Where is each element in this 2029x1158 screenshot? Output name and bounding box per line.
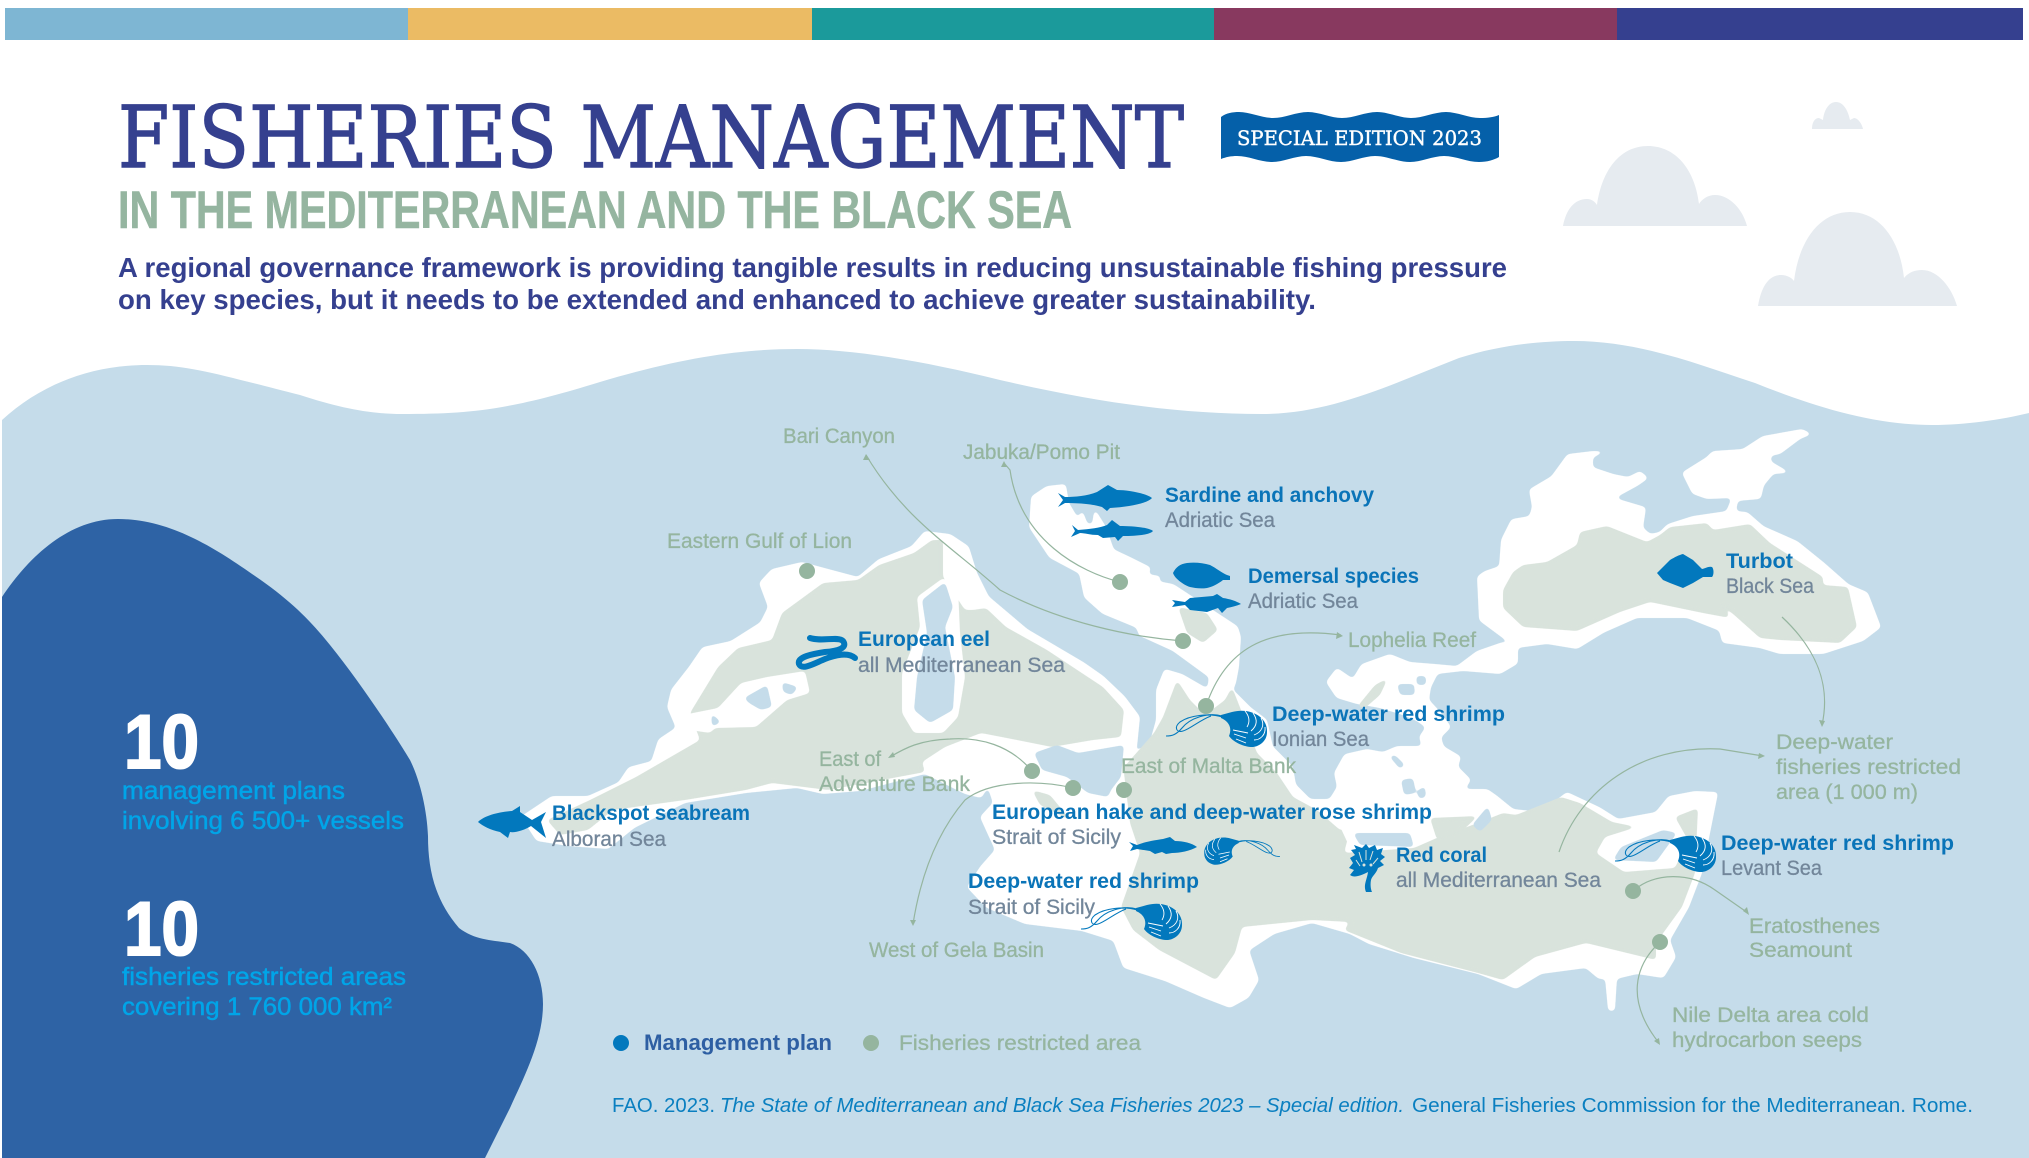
icon: demersal flatfish <box>1173 563 1230 588</box>
figure: restricted areas <box>122 887 406 1021</box>
plan: deep-water red shrimp, Ionian: Deep-water red shrimp <box>1272 703 1505 726</box>
label: Deep-water fisheries restricted area: Deep-water <box>1776 731 1893 754</box>
icon: rose shrimp <box>1204 838 1280 865</box>
plan: turbot <box>1726 550 1814 598</box>
badge: special edition <box>1221 112 1499 162</box>
sea background <box>2 341 2029 1158</box>
plan: european hake and rose shrimp: European hake and deep-water rose shrimp <box>992 801 1432 824</box>
source citation: The State of Mediterranean and Black Sea Fisheries 2023 – Special edition. <box>720 1095 1404 1117</box>
label: Nile Delta: hydrocarbon seeps <box>1672 1029 1862 1052</box>
plan: deep-water red shrimp, Ionian: Ionian Sea <box>1272 728 1369 751</box>
label: Bari Canyon: Bari Canyon <box>783 425 895 448</box>
plan: european hake and rose shrimp <box>992 801 1432 849</box>
icon: turbot <box>1657 554 1714 588</box>
restricted area dots <box>799 563 1668 950</box>
top colour band <box>5 8 2023 40</box>
plan: blackspot seabream: Alboran Sea <box>552 828 666 851</box>
icon: demersal fish <box>1172 594 1241 613</box>
plan: demersal species: Demersal species <box>1248 565 1419 588</box>
title: FISHERIES MANAGEMENT <box>118 89 1184 188</box>
plan: deep-water red shrimp, Sicily: Deep-water red shrimp <box>968 870 1199 893</box>
label: Eratosthenes Seamount: Seamount <box>1749 939 1852 962</box>
subtitle: IN THE MEDITERRANEAN AND THE BLACK SEA <box>118 181 1072 240</box>
label: Eastern Gulf of Lion: Eastern Gulf of Lion <box>667 530 852 553</box>
label: Deep-water fisheries restricted area <box>1776 731 1961 804</box>
plan: sardine and anchovy: Adriatic Sea <box>1165 509 1275 532</box>
figure: management plans: management plans <box>122 777 345 805</box>
badge: special edition: SPECIAL EDITION 2023 <box>1237 126 1482 150</box>
icon: anchovy <box>1071 520 1153 541</box>
icon: red coral <box>1349 844 1385 892</box>
label: Deep-water fisheries restricted area: fisheries restricted <box>1776 756 1961 779</box>
label: Lophelia Reef: Lophelia Reef <box>1348 629 1476 652</box>
figure: restricted areas: covering 1 760 000 km² <box>122 993 392 1021</box>
plan: deep-water red shrimp, Levant <box>1721 832 1954 880</box>
plan: demersal species <box>1248 565 1419 613</box>
leader lines and arrows <box>863 454 1825 1045</box>
figure: management plans: involving 6 500+ vessels <box>122 807 404 835</box>
plan: european eel <box>858 628 1065 677</box>
label: Deep-water fisheries restricted area: area (1 000 m) <box>1776 781 1918 804</box>
label: Jabuka/Pomo Pit: Jabuka/Pomo Pit <box>963 441 1120 464</box>
label: East of Adventure Bank: East of <box>819 748 881 771</box>
legend: Fisheries restricted area <box>899 1032 1141 1055</box>
figure: management plans: 10 <box>124 700 199 785</box>
label: Nile Delta: Nile Delta area cold <box>1672 1004 1869 1027</box>
label: East of Adventure Bank <box>819 748 970 796</box>
icon: red shrimp, Strait of Sicily <box>1081 904 1182 940</box>
intro text <box>118 252 1507 315</box>
plan: blackspot seabream: Blackspot seabream <box>552 802 750 825</box>
panel: key figures <box>2 519 543 1158</box>
plan: blackspot seabream <box>552 802 750 851</box>
plan: turbot: Black Sea <box>1726 575 1814 598</box>
legend <box>613 1030 1141 1055</box>
plan: deep-water red shrimp, Sicily: Strait of Sicily <box>968 896 1095 919</box>
plan: demersal species: Adriatic Sea <box>1248 590 1358 613</box>
plan: deep-water red shrimp, Ionian <box>1272 703 1505 751</box>
icon: sardine <box>1058 485 1152 511</box>
icon: red shrimp, Levant Sea <box>1615 836 1716 872</box>
figure: management plans <box>122 700 404 835</box>
plan: european eel: all Mediterranean Sea <box>858 654 1065 677</box>
clouds <box>1563 102 1957 306</box>
label: West of Gela Basin: West of Gela Basin <box>869 939 1044 962</box>
plan: red coral: Red coral <box>1396 844 1487 867</box>
intro text: A regional governance framework is providing tangible results in reducing unsustainable fishing pressure <box>118 252 1507 283</box>
plan: sardine and anchovy: Sardine and anchovy <box>1165 484 1374 507</box>
plan: deep-water red shrimp, Levant: Levant Sea <box>1721 857 1822 880</box>
plan: european eel: European eel <box>858 628 990 651</box>
map: Mediterranean and Black Sea <box>522 430 1880 1010</box>
figure: restricted areas: fisheries restricted areas <box>122 963 406 991</box>
label: East of Adventure Bank: Adventure Bank <box>819 773 970 796</box>
plan: red coral <box>1396 844 1601 892</box>
icon: european hake <box>1129 837 1197 854</box>
label: Eratosthenes Seamount <box>1749 915 1880 962</box>
plan: deep-water red shrimp, Sicily <box>968 870 1199 919</box>
plan: red coral: all Mediterranean Sea <box>1396 869 1601 892</box>
plan: turbot: Turbot <box>1726 550 1793 573</box>
icon: european eel <box>799 638 855 667</box>
label: Eratosthenes Seamount: Eratosthenes <box>1749 915 1880 938</box>
plan: deep-water red shrimp, Levant: Deep-water red shrimp <box>1721 832 1954 855</box>
icon: blackspot seabream <box>478 806 546 838</box>
source citation: General Fisheries Commission for the Mediterranean. Rome. <box>1412 1095 1973 1117</box>
plan: european hake and rose shrimp: Strait of Sicily <box>992 826 1122 849</box>
source citation: FAO. 2023. <box>612 1095 715 1117</box>
figure: restricted areas: 10 <box>124 887 199 972</box>
label: East of Malta Bank: East of Malta Bank <box>1121 755 1296 778</box>
icon: red shrimp, Ionian Sea <box>1166 711 1267 747</box>
label: Nile Delta <box>1672 1004 1869 1052</box>
plan: sardine and anchovy <box>1165 484 1374 532</box>
source citation <box>612 1095 1973 1117</box>
legend: Management plan <box>644 1030 832 1055</box>
intro text: on key species, but it needs to be extended and enhanced to achieve greater sustainability. <box>118 284 1316 315</box>
